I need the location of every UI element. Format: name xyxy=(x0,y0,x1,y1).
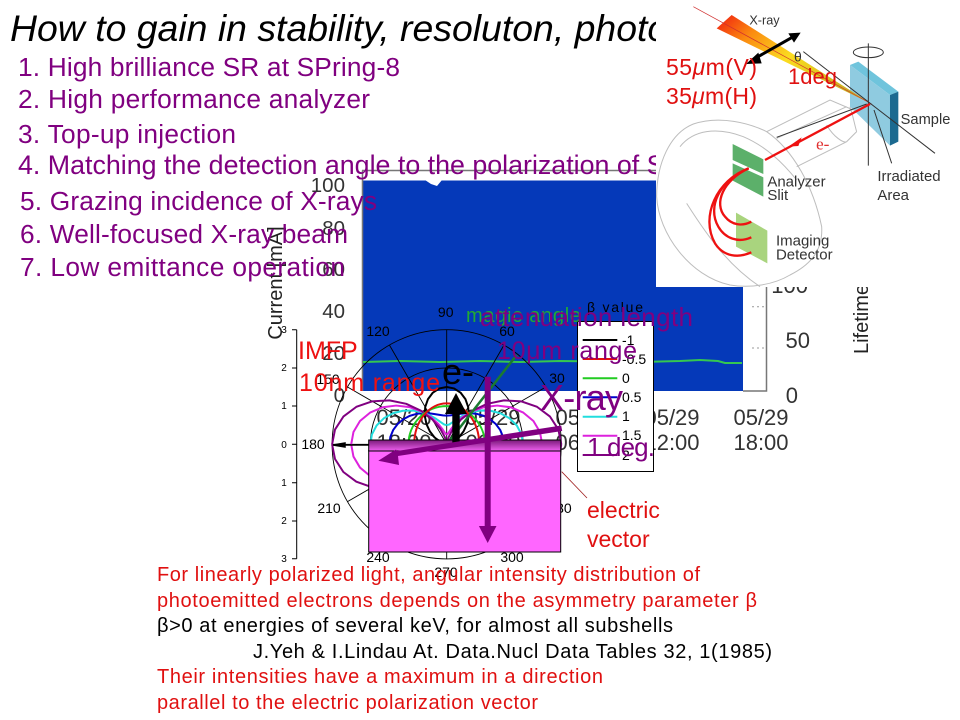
sample block xyxy=(850,62,898,146)
angle labels: 120 xyxy=(366,323,390,339)
imaging detector xyxy=(736,213,767,263)
magic angle label: magic angle xyxy=(466,305,581,327)
time axis labels: 05/29 xyxy=(465,405,521,430)
setup labels: Sample xyxy=(901,112,950,128)
setup labels: Imaging xyxy=(776,233,829,250)
purple arrow: electric vector xyxy=(479,377,496,543)
title: How to gain in stability, resoluton, photoelectron xyxy=(10,7,801,49)
time axis labels: 12:00 xyxy=(644,430,700,455)
legend values: 2 xyxy=(622,447,630,463)
IMFP label: IMFP xyxy=(298,337,358,365)
radial axis labels: 2 xyxy=(281,363,287,374)
black arrow: emitted electron xyxy=(445,393,467,443)
x-ray beam xyxy=(717,15,872,104)
explanatory text: For linearly polarized light, angular intensity distribution of xyxy=(157,564,700,586)
legend: beta value xyxy=(578,299,654,472)
angle labels: 90 xyxy=(438,304,454,320)
right axis labels: 0 xyxy=(786,383,798,408)
polarization double arrow xyxy=(746,33,801,64)
legend values: -0.5 xyxy=(622,351,646,367)
polar plot of photoelectron angular distribution xyxy=(281,304,572,580)
numbered list: 4. Matching the detection angle to the polarization of SR xyxy=(18,150,684,180)
time axis labels: 05/26 xyxy=(376,405,432,430)
time axis labels: 18:00 xyxy=(733,430,789,455)
radial axis labels: 1 xyxy=(281,401,287,412)
time axis labels: 18:00 xyxy=(376,430,432,455)
numbered list: 1. High brilliance SR at SPring-8 xyxy=(18,52,400,82)
electric vector label: electric xyxy=(587,497,660,523)
explanatory text: J.Yeh & I.Lindau At. Data.Nucl Data Tables 32, 1(1985) xyxy=(253,641,772,663)
setup labels: θ xyxy=(794,49,802,65)
angle labels xyxy=(301,304,572,580)
numbered list: 6. Well-focused X-ray beam xyxy=(20,219,348,249)
angle labels: 240 xyxy=(366,549,390,565)
setup labels: Detector xyxy=(776,246,833,263)
numbered list xyxy=(18,52,684,282)
left axis labels: 80 xyxy=(322,217,345,240)
right axis labels xyxy=(771,273,810,408)
IMFP range label: 10nm range xyxy=(299,369,440,397)
radial axis labels: 3 xyxy=(281,325,287,336)
numbered list: 3. Top-up injection xyxy=(18,119,236,149)
beam size labels xyxy=(666,54,837,109)
time axis labels: 05/29 xyxy=(644,405,700,430)
legend values xyxy=(622,332,646,463)
purple arrow: incident x-ray xyxy=(378,426,562,465)
numbered list: 7. Low emittance operation xyxy=(20,252,345,282)
left axis labels: 60 xyxy=(322,258,345,281)
right axis title: Lifetime xyxy=(851,284,873,354)
beam size labels: 55μm(V) xyxy=(666,54,757,80)
polar grid xyxy=(332,330,561,559)
legend values: 1 xyxy=(622,408,630,424)
geometry labels xyxy=(298,302,693,552)
distribution curves xyxy=(332,387,561,502)
explanatory text: photoemitted electrons depends on the asymmetry parameter β xyxy=(157,590,757,612)
chart: beam current and lifetime xyxy=(265,170,873,455)
setup labels: Slit xyxy=(767,187,789,204)
diagram: photoelectron analyzer setup xyxy=(656,0,960,287)
electron arrowhead xyxy=(788,137,802,147)
current trace xyxy=(363,360,742,363)
left axis labels: 40 xyxy=(322,300,345,323)
time axis labels: 05/29 xyxy=(555,405,611,430)
left axis labels: 0 xyxy=(334,384,345,407)
left axis labels: 20 xyxy=(322,342,345,365)
beam size labels: 1deg xyxy=(788,64,837,89)
sample block in geometry sketch xyxy=(369,440,561,552)
setup labels: Analyzer xyxy=(767,174,826,191)
right axis labels: 50 xyxy=(786,328,810,353)
180 degree arrow xyxy=(333,443,372,447)
sample surface strip xyxy=(369,440,561,451)
right axis labels: 100 xyxy=(771,273,808,298)
setup labels: Irradiated xyxy=(877,168,941,185)
angle labels: 60 xyxy=(499,323,515,339)
analyzer outline xyxy=(657,100,857,287)
chart plot area xyxy=(362,180,743,391)
radial axis labels: 2 xyxy=(281,516,287,527)
one degree label: 1 deg. xyxy=(587,432,655,462)
attenuation length label: attenuation length xyxy=(480,302,693,332)
legend title: β value xyxy=(587,299,643,315)
angle labels: 330 xyxy=(548,500,572,516)
setup labels xyxy=(749,13,950,263)
magic angle line xyxy=(447,355,517,444)
setup labels: X-ray xyxy=(749,13,780,27)
attenuation range label: 10μm range xyxy=(497,337,637,365)
radial axis labels xyxy=(281,325,287,565)
angle labels: 30 xyxy=(549,370,565,386)
left axis labels: 100 xyxy=(311,174,345,197)
electron label: e- xyxy=(816,134,830,153)
legend values: 0 xyxy=(622,370,630,386)
explanatory text: parallel to the electric polarization vector xyxy=(157,692,538,714)
angle labels: 300 xyxy=(500,549,524,565)
radial axis xyxy=(292,330,297,559)
beam size labels: 35μm(H) xyxy=(666,83,757,109)
legend values: -1 xyxy=(622,332,635,348)
explanatory text: β>0 at energies of several keV, for almost all subshells xyxy=(157,615,673,637)
time axis labels: 05/29 xyxy=(733,405,789,430)
time axis labels xyxy=(376,405,789,455)
explanatory text: Their intensities have a maximum in a direction xyxy=(157,666,603,688)
numbered list: 5. Grazing incidence of X-rays xyxy=(20,186,377,216)
rotation symbol xyxy=(853,47,883,58)
setup labels: Area xyxy=(877,187,910,204)
electron label: e- xyxy=(442,351,474,392)
angle labels: 270 xyxy=(434,564,458,580)
left axis title: Current [mA] xyxy=(265,226,287,340)
angle labels: 150 xyxy=(316,371,340,387)
x-ray label: X-ray xyxy=(540,377,623,418)
time axis labels: 06:00 xyxy=(555,430,611,455)
time axis labels: 00:00 xyxy=(465,430,521,455)
line to electric vector xyxy=(562,472,587,498)
explanatory text xyxy=(157,564,772,714)
angle labels: 180 xyxy=(301,436,325,452)
legend values: 0.5 xyxy=(622,389,642,405)
legend swatches xyxy=(583,340,617,455)
geometry labels: vector xyxy=(587,526,650,552)
curve: beta 0 xyxy=(408,406,485,482)
legend values: 1.5 xyxy=(622,427,642,443)
curve: beta -0.5 xyxy=(414,403,479,485)
radial axis labels: 0 xyxy=(281,440,287,451)
numbered list: 2. High performance analyzer xyxy=(18,84,370,114)
analyzer slit xyxy=(733,144,763,197)
radial axis labels: 1 xyxy=(281,478,287,489)
angle labels: 210 xyxy=(317,500,341,516)
electron trajectories xyxy=(709,104,870,256)
radial axis labels: 3 xyxy=(281,554,287,565)
left axis labels xyxy=(311,174,345,407)
